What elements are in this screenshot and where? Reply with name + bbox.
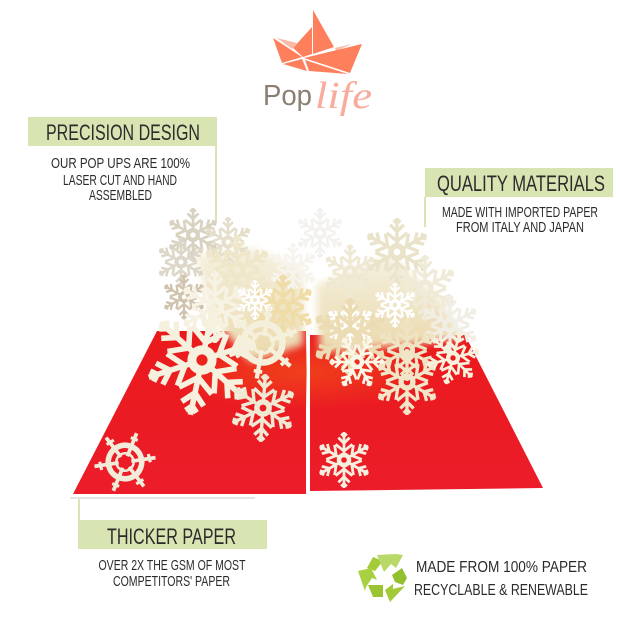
description: OVER 2X THE GSM OF MOST — [98, 557, 246, 574]
pop-up card photo — [70, 208, 543, 501]
orange glow under flakes — [160, 334, 440, 410]
heading: PRECISION DESIGN — [46, 120, 200, 145]
pop-up snowflakes left — [156, 208, 318, 343]
flat snowflake: mid left — [226, 372, 300, 444]
panel: quality materials — [424, 168, 613, 236]
flat snowflake: center right — [319, 324, 395, 400]
heading band — [28, 117, 217, 146]
pop-up backing paper — [195, 248, 462, 362]
connector line — [215, 146, 217, 222]
wreath snowflake: bottom left — [89, 423, 161, 501]
connector line — [78, 499, 80, 521]
panel: recycling — [358, 554, 588, 602]
centre fold — [307, 335, 310, 495]
description — [51, 155, 190, 204]
panel: precision design — [28, 117, 217, 222]
recycling text — [414, 559, 588, 599]
flat snowflake: bottom center — [316, 432, 372, 488]
panel: thicker paper — [78, 499, 267, 590]
logo word: Pop: Pop — [263, 80, 312, 112]
flat snowflake: far right — [420, 325, 486, 391]
connector line — [424, 197, 426, 227]
description: OUR POP UPS ARE 100% — [51, 155, 190, 172]
icon: recycle arrows — [358, 554, 407, 602]
logo: Poplife — [263, 10, 372, 117]
recycling text: MADE FROM 100% PAPER — [416, 559, 587, 576]
description: COMPETITORS' PAPER — [113, 573, 230, 590]
flat snowflake: large — [135, 293, 269, 427]
wreath snowflake — [226, 302, 300, 384]
description: LASER CUT AND HAND — [63, 172, 177, 189]
description: ASSEMBLED — [89, 187, 152, 204]
heading band — [78, 520, 267, 549]
description — [442, 205, 598, 236]
heading: THICKER PAPER — [107, 524, 236, 549]
card shadow — [70, 497, 255, 499]
flat snowflake: lower right — [373, 349, 441, 415]
card right panel — [310, 335, 543, 491]
description: FROM ITALY AND JAPAN — [456, 220, 584, 236]
card left panel — [73, 331, 306, 494]
icon: origami boat — [273, 10, 362, 74]
pop-up snowflakes right — [295, 208, 480, 381]
heading band — [425, 168, 613, 197]
logo word: life: life — [315, 75, 372, 117]
description — [98, 557, 246, 590]
